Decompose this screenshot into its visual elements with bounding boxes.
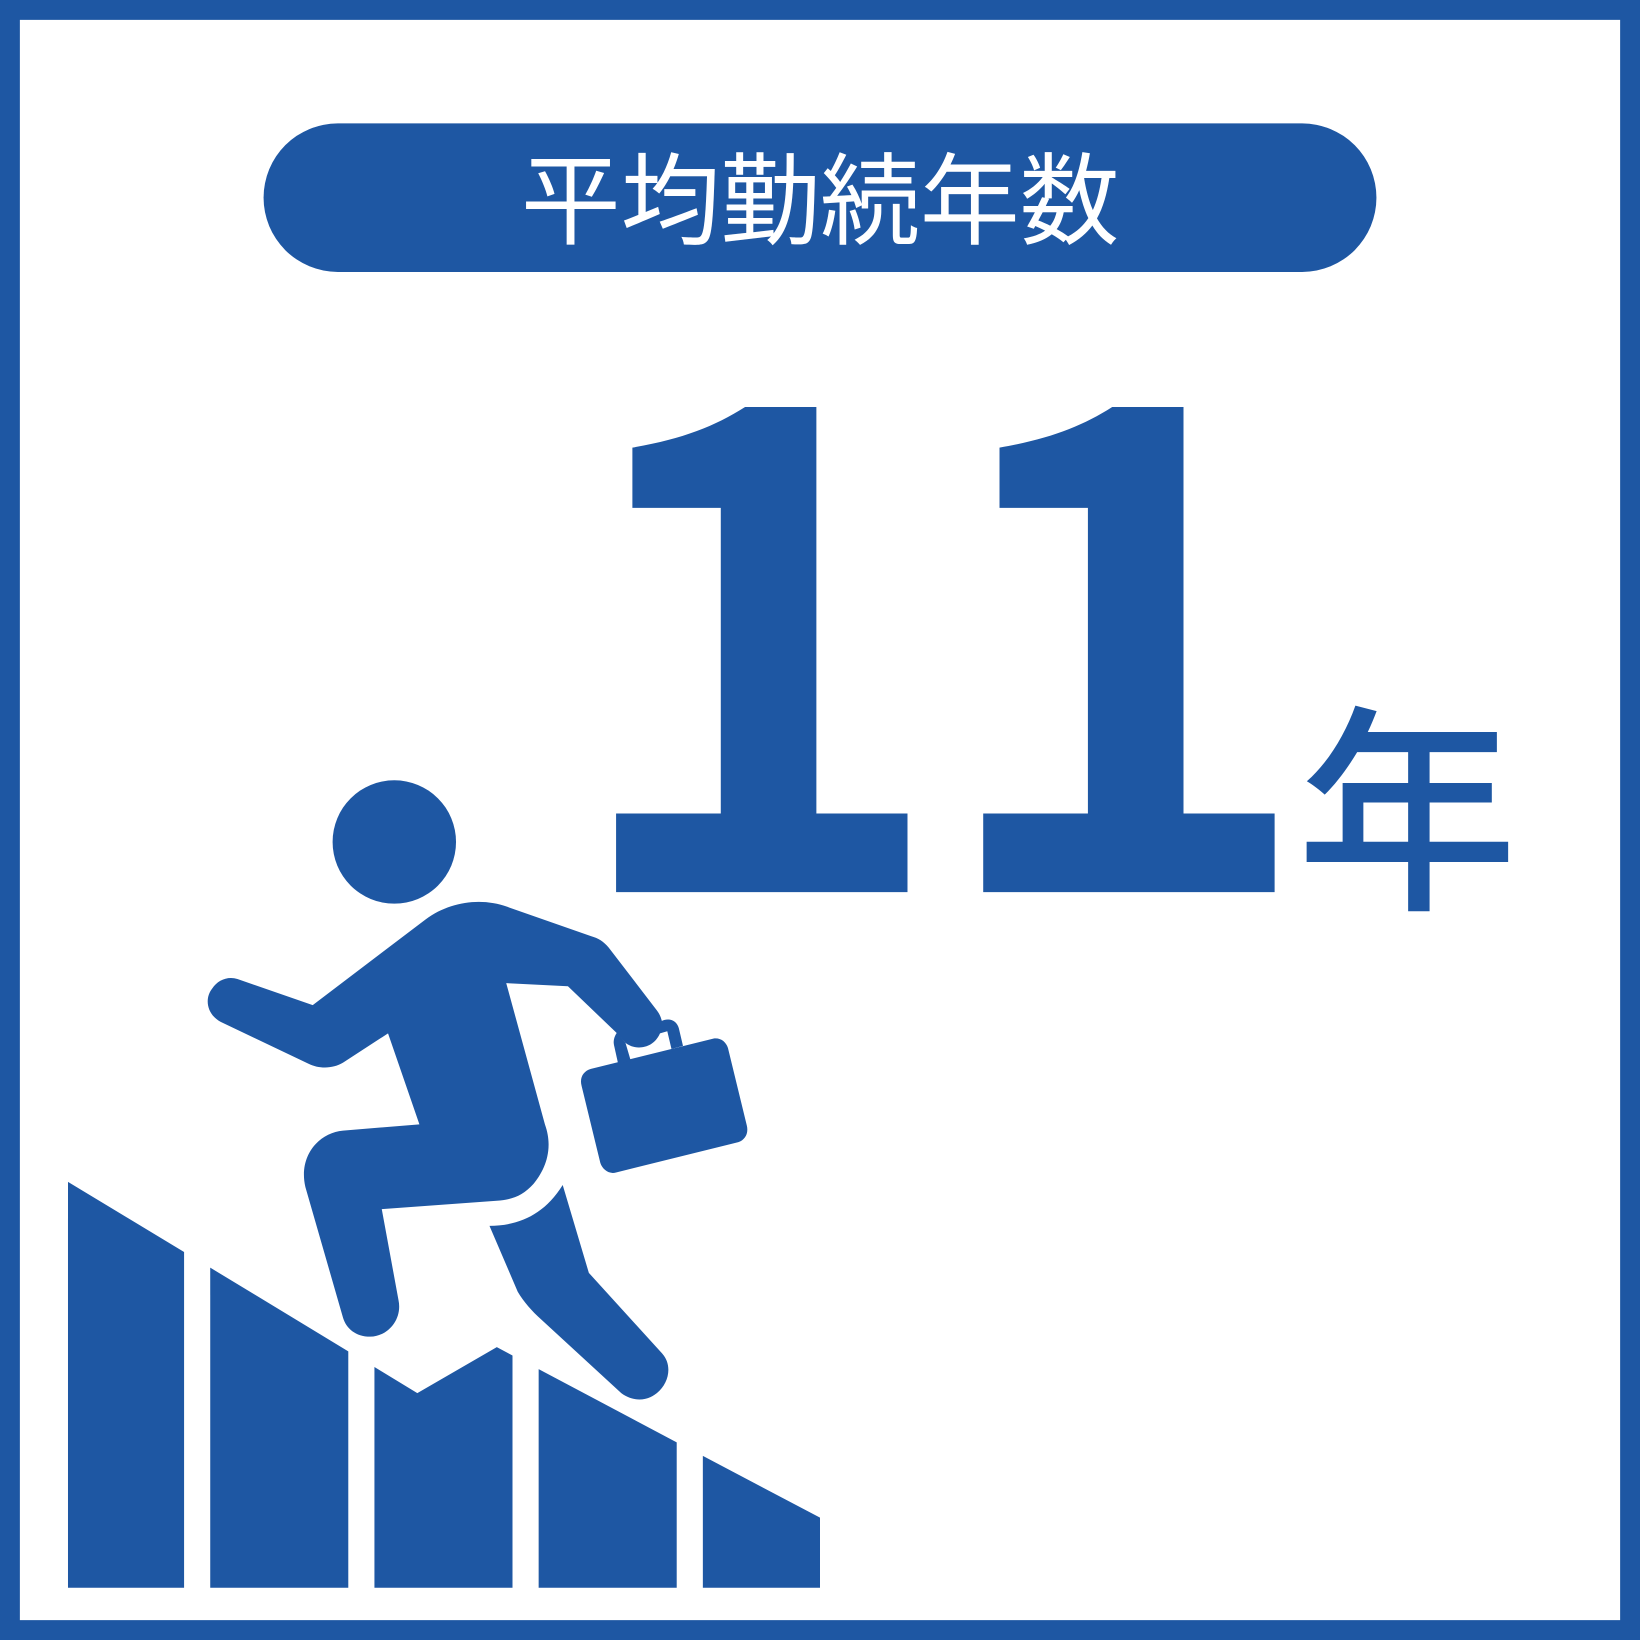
bar 1 <box>68 1182 184 1588</box>
torso, arms and front leg <box>208 902 662 1337</box>
icon: businessman climbing stairs <box>208 780 747 1399</box>
back leg <box>489 1185 668 1399</box>
heading text: 平均勤続年数 <box>521 120 1119 265</box>
bar 5 <box>703 1456 820 1588</box>
head <box>333 780 456 904</box>
briefcase <box>581 1020 747 1173</box>
heading pill <box>264 120 1376 272</box>
big number: 11 <box>562 133 1316 1081</box>
bar 4 <box>539 1369 677 1588</box>
unit: 年 <box>1297 637 1518 957</box>
descending stairs chart <box>68 1182 820 1588</box>
bar 3 <box>374 1347 512 1588</box>
bar 2 <box>210 1268 348 1588</box>
